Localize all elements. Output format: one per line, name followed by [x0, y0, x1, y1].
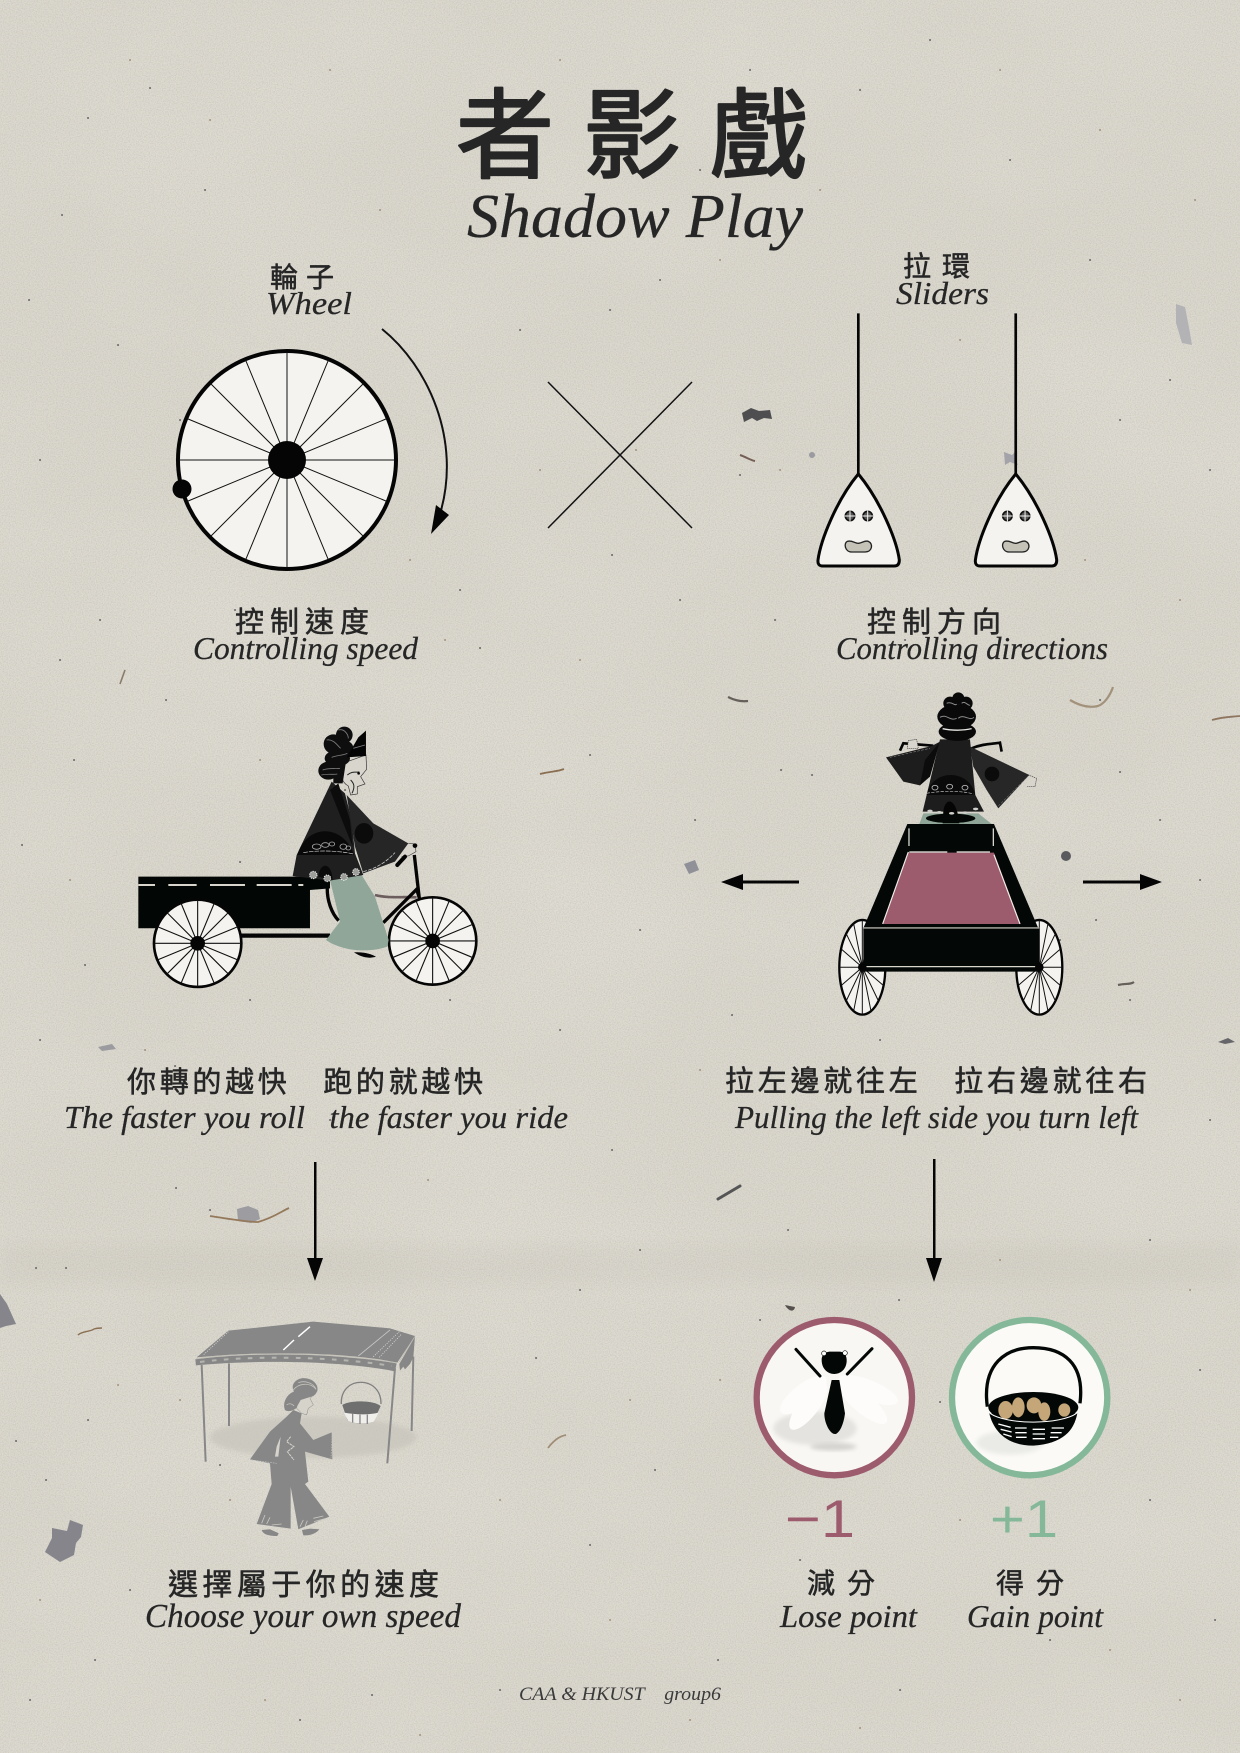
text: controlling directions: [836, 606, 1108, 666]
arrow: left: [721, 874, 799, 890]
text: gain point: [967, 1568, 1104, 1634]
text: choose your own speed: Choose your own speed: [145, 1598, 462, 1635]
title: [456, 81, 808, 251]
label: wheel: Wheel: [266, 285, 352, 321]
icon: gain point basket in circle: [952, 1320, 1107, 1475]
label: wheel: 輪子: [270, 262, 334, 293]
text: roll faster, ride faster: [64, 1066, 568, 1135]
text: gain point: Gain point: [967, 1598, 1104, 1634]
arrow: down right: [926, 1159, 942, 1282]
score: plus one: +1: [990, 1490, 1058, 1549]
text: controlling speed: Controlling speed: [193, 630, 419, 666]
icon: left slider: [818, 313, 899, 566]
text: pull left, turn left: 拉左邊就往左 拉右邊就往右: [725, 1065, 1147, 1098]
icon: right slider: [975, 313, 1057, 566]
footer credit: CAA & HKUST group6: [519, 1684, 722, 1705]
label: sliders: [896, 251, 989, 311]
text: controlling speed: 控制速度: [235, 606, 369, 639]
arrow: down left: [307, 1162, 323, 1281]
icon: big wheel: [172, 351, 396, 569]
text: choose your own speed: [145, 1569, 462, 1635]
text: roll faster, ride faster: 你轉的越快 跑的就越快: [127, 1066, 483, 1099]
icon: lose point fly in circle: [757, 1320, 912, 1475]
text: pull left, turn left: [725, 1065, 1147, 1135]
arrow: right: [1083, 874, 1162, 890]
label: sliders: 拉環: [903, 251, 970, 282]
title: Shadow Play: [467, 183, 803, 251]
illustration: figure under canopy with basket (grey): [195, 1322, 417, 1536]
text: controlling speed: [193, 606, 419, 666]
text: gain point: 得分: [996, 1568, 1064, 1599]
text: controlling directions: 控制方向: [867, 606, 1001, 639]
text: lose point: [779, 1568, 918, 1634]
cross sign: [548, 382, 692, 528]
score: minus one: −1: [785, 1490, 855, 1549]
text: choose your own speed: 選擇屬于你的速度: [168, 1569, 439, 1602]
label: wheel: [266, 262, 352, 321]
label: sliders: Sliders: [896, 275, 989, 311]
arrow: wheel rotation: [382, 329, 449, 534]
text: lose point: Lose point: [779, 1598, 918, 1634]
text: lose point: 減分: [807, 1568, 875, 1599]
text: pull left, turn left: Pulling the left side you turn left: [734, 1099, 1139, 1135]
text: controlling directions: Controlling directions: [836, 630, 1108, 666]
illustration: figure riding cargo tricycle, side view: [138, 727, 476, 987]
text: roll faster, ride faster: The faster you roll the faster you ride: [64, 1099, 568, 1135]
title: 者影戲: [456, 81, 808, 191]
illustration: figure on tricycle, rear view: [839, 692, 1062, 1015]
